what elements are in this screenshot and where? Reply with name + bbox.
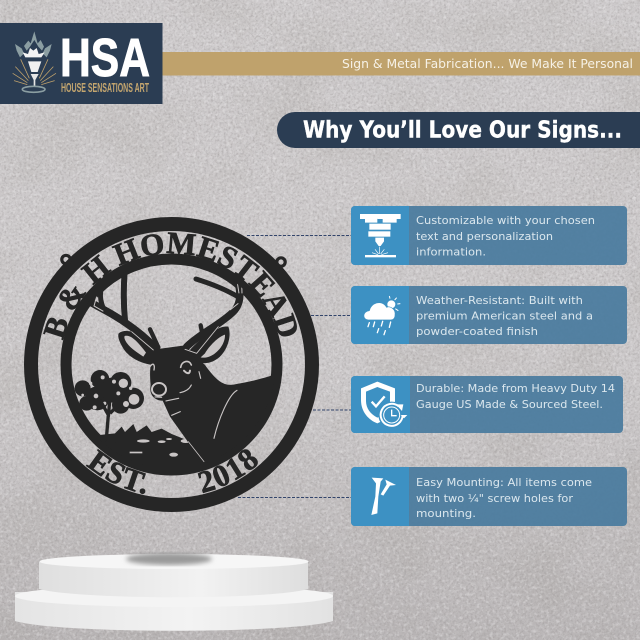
panel text: powder-coated finish <box>416 325 538 338</box>
panel text: Durable: Made from Heavy Duty 14 <box>416 382 615 395</box>
deer right ear <box>190 327 230 363</box>
gold tagline banner: Sign & Metal Fabrication... We Make It Personal <box>342 56 633 71</box>
panel text: text and personalization <box>416 230 553 243</box>
panel: customizable <box>351 206 627 265</box>
deer face details <box>132 327 237 462</box>
panel text: Weather-Resistant: Built with <box>416 294 583 307</box>
hanging loops <box>62 255 285 266</box>
panel: easy mounting <box>351 467 627 526</box>
panel text: Gauge US Made & Sourced Steel. <box>416 398 603 411</box>
metal sign: B & H Homestead deer <box>24 217 319 512</box>
panel text: mounting. <box>416 507 476 520</box>
panel text <box>416 476 592 520</box>
sign text: EST.: EST. <box>86 448 146 494</box>
icon: laser cutter <box>360 214 401 257</box>
logo: HSA House Sensations Art: HOUSE SENSATIONS ART <box>61 81 149 95</box>
icon: sun cloud rain <box>364 296 400 335</box>
panel: weather-resistant <box>351 286 627 344</box>
logo: HSA House Sensations Art <box>0 23 162 104</box>
panel text: premium American steel and a <box>416 310 593 322</box>
icon: screws <box>371 478 396 515</box>
deer antlers <box>83 267 240 347</box>
deer body and head <box>150 346 271 458</box>
sign text: 2018: 2018 <box>198 449 258 494</box>
icon: shield and clock <box>361 382 407 428</box>
inner ring <box>66 259 277 470</box>
ground scene <box>74 274 271 464</box>
panel text: Customizable with your chosen <box>416 214 595 227</box>
sign text: B & H HOMESTEAD: B & H HOMESTEAD <box>43 232 297 340</box>
panel: durable <box>351 376 623 433</box>
panel text: with two ¼" screw holes for <box>416 492 573 505</box>
pedestal <box>15 553 333 631</box>
deer <box>74 274 271 462</box>
logo: HSA House Sensations Art: HSA <box>60 28 150 88</box>
panel text <box>416 294 593 338</box>
outer ring <box>31 224 312 505</box>
panel text <box>416 382 615 411</box>
sign shadow <box>126 553 212 565</box>
tree <box>74 370 144 434</box>
heading pill <box>277 112 640 148</box>
deer left ear <box>118 331 155 365</box>
panel text <box>416 214 595 258</box>
icon: torch with lotus <box>13 31 56 92</box>
panel text: information. <box>416 246 486 258</box>
panel text: Easy Mounting: All items come <box>416 476 592 489</box>
gold tagline banner <box>162 52 640 76</box>
